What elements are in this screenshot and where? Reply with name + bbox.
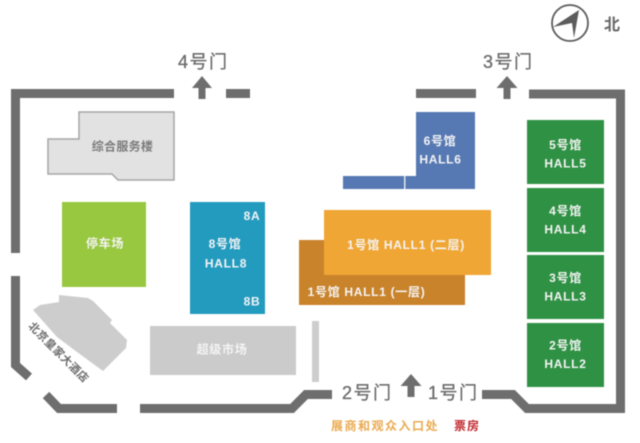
supermarket: 超级市场 xyxy=(197,342,247,356)
hall 6 xyxy=(343,112,475,189)
hall 8: HALL8 xyxy=(205,256,247,270)
hall 8 xyxy=(190,202,265,314)
parking xyxy=(62,202,146,287)
general services building: 综合服务楼 xyxy=(92,138,153,154)
perimeter walls xyxy=(16,94,620,408)
hall 3 xyxy=(527,255,604,319)
hall 5: HALL5 xyxy=(544,156,587,170)
hall 4 xyxy=(527,188,604,252)
door 1 and 2 arrow xyxy=(400,374,422,397)
door 4 label: 4号门 xyxy=(178,52,229,72)
door 3 arrow xyxy=(496,76,518,99)
hall 6: HALL6 xyxy=(419,152,462,166)
hall 4: 4号馆 xyxy=(549,203,582,218)
hall 1 lower floor: 1号馆 HALL1 (一层) xyxy=(308,284,425,299)
door 1 label: 1号门 xyxy=(428,383,479,403)
hall 3: 3号馆 xyxy=(549,270,582,285)
hall 2: 2号馆 xyxy=(549,338,582,352)
hall 8: 8B xyxy=(244,294,260,308)
hall 1 upper floor: 1号馆 HALL1 (二层) xyxy=(347,237,465,252)
north label: 北 xyxy=(604,16,620,34)
door 4 arrow xyxy=(192,76,212,99)
hall 1 lower floor xyxy=(299,240,465,305)
compass xyxy=(552,5,588,41)
general services building xyxy=(48,112,174,180)
hall 6: 6号馆 xyxy=(424,133,456,148)
hall 1 upper floor xyxy=(324,210,491,275)
hall 4: HALL4 xyxy=(544,222,587,236)
hall 2 xyxy=(527,323,604,387)
door 2 label: 2号门 xyxy=(342,383,393,403)
grey strip xyxy=(312,321,319,382)
hall 2: HALL2 xyxy=(544,357,587,371)
supermarket xyxy=(150,326,296,375)
hotel label: 北京皇家大酒店 xyxy=(26,319,92,385)
hotel xyxy=(33,295,127,371)
door 3 label: 3号门 xyxy=(483,52,534,72)
hall 8: 8号馆 xyxy=(209,236,241,251)
hall 8: 8A xyxy=(244,209,260,223)
ticket office legend: 票房 xyxy=(454,418,480,433)
hall 5 xyxy=(527,120,604,184)
hall 3: HALL3 xyxy=(544,290,587,304)
entrance legend: 展商和观众入口处 xyxy=(331,418,439,433)
parking: 停车场 xyxy=(86,236,124,250)
hall 5: 5号馆 xyxy=(549,137,582,152)
